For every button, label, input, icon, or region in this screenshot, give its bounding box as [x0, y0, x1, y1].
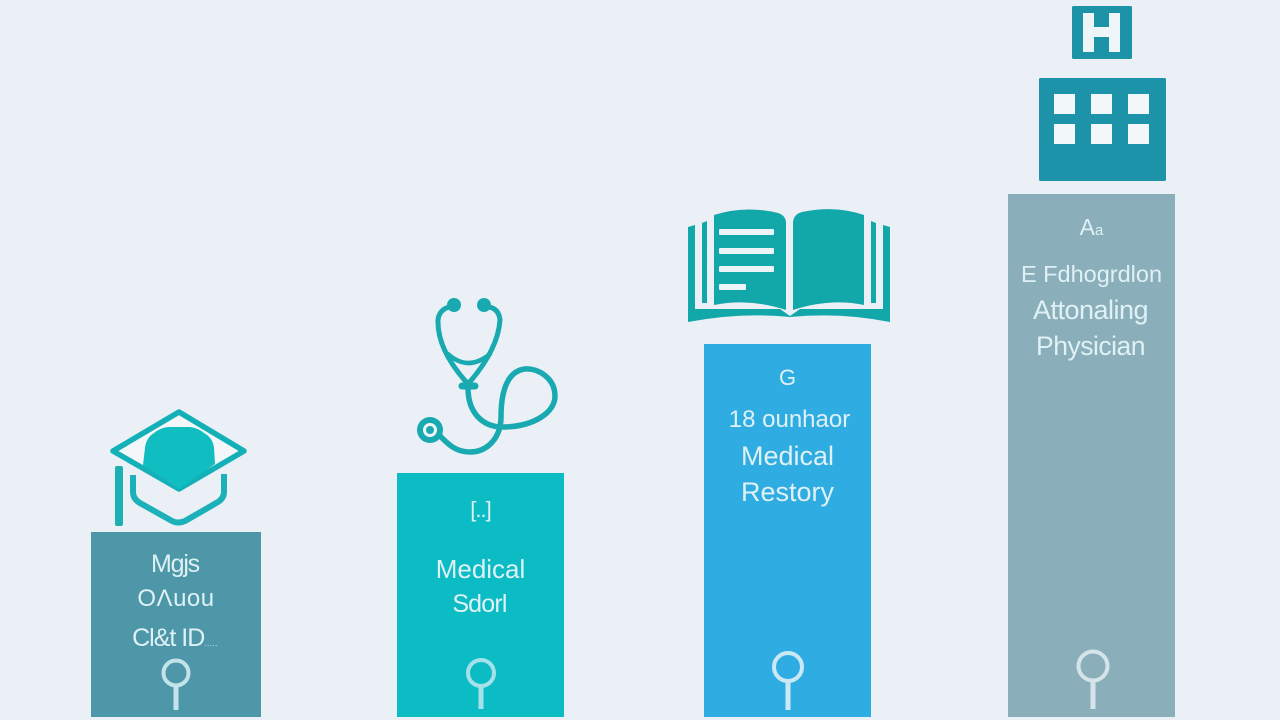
panel: step 4 bar	[1008, 194, 1175, 717]
label: step 2 line 3: Sdorl	[452, 590, 507, 618]
icon: open book	[688, 209, 890, 322]
panel: step 1 bar	[91, 532, 261, 717]
label: step 4 line 2: E Fdhogrdlon	[1021, 261, 1162, 287]
label: step 4 line 3: Attonaling	[1033, 295, 1148, 325]
label: step 3 line 1: G	[779, 365, 796, 390]
label: step 2 line 2: Medical	[436, 554, 525, 584]
icon: hospital building	[1039, 78, 1166, 181]
label: step 3 line 4: Restory	[741, 477, 834, 507]
label: step 3 line 2: 18 ounhaor	[729, 406, 850, 433]
label: step 4 line 1: Aa	[1080, 214, 1103, 240]
label: step 4 line 4: Physician	[1036, 331, 1145, 361]
panel: step 2 bar	[397, 473, 564, 717]
label: step 2 line 1: [..]	[470, 497, 491, 522]
icon: step 4 pin	[1076, 650, 1110, 709]
icon: graduation cap	[113, 412, 244, 526]
icon: stethoscope	[417, 298, 555, 452]
label: step 1 line 2: OɅuou	[137, 585, 215, 612]
panel: step 3 bar	[704, 344, 871, 717]
label: step 3 line 3: Medical	[741, 441, 834, 471]
label: step 1 line 1: Mgjs	[151, 550, 199, 578]
icon: hospital sign	[1072, 6, 1132, 59]
icon: step 3 pin	[772, 651, 804, 710]
icon: step 2 pin	[466, 658, 496, 709]
label: step 1 line 3: Cl&t ID.....	[132, 624, 218, 652]
icon: step 1 pin	[162, 658, 190, 710]
